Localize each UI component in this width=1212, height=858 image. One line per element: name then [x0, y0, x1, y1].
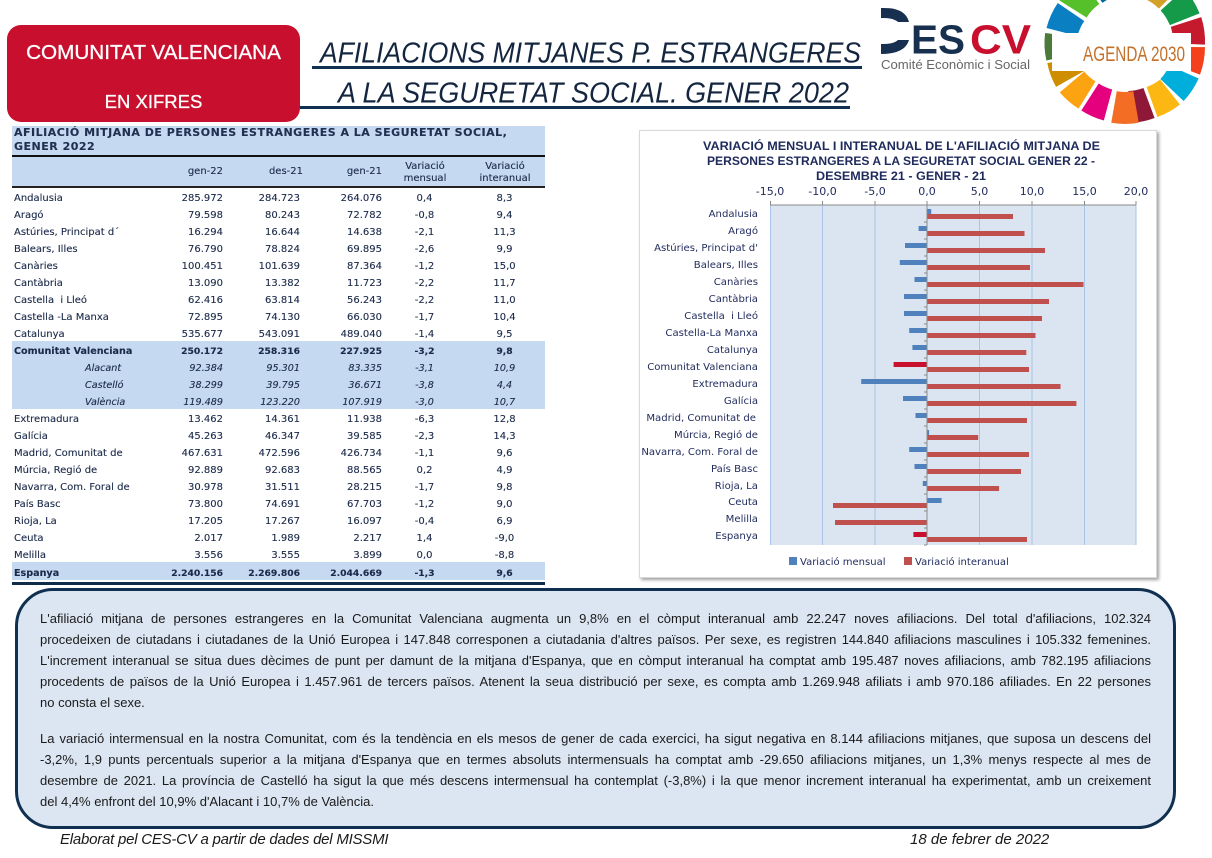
category labels: Astúries, Principat d': [654, 242, 758, 254]
badge: Comunitat Valenciana en xifres: [7, 25, 300, 122]
table rows: -3,8: [415, 380, 434, 391]
table rows: 9,9: [497, 244, 512, 255]
table rows: 0,2: [417, 465, 432, 476]
table rows: 46.347: [265, 431, 300, 442]
table rows: 6,9: [497, 516, 512, 527]
table rows: Melilla: [14, 550, 46, 561]
table rows: -1,2: [415, 499, 434, 510]
table rows: Andalusia: [14, 193, 63, 204]
category labels: Galícia: [724, 395, 758, 407]
table rows: Ceuta: [14, 533, 44, 544]
table column headers: des-21: [269, 166, 303, 177]
table column headers: gen-22: [188, 166, 223, 177]
table rows: 39.585: [347, 431, 382, 442]
table rows: -2,6: [415, 244, 434, 255]
logo: CES CV: Comité Econòmic i Social: [881, 58, 1030, 72]
table rows: 10,9: [494, 363, 515, 374]
table rows: 1,4: [417, 533, 432, 544]
table rows: 2.217: [353, 533, 382, 544]
table rows: 80.243: [265, 210, 300, 221]
table rows: -1,7: [415, 482, 434, 493]
table rows: 63.814: [265, 295, 300, 306]
table rows: Rioja, La: [14, 516, 57, 527]
table rows: 31.511: [265, 482, 300, 493]
chart title: [703, 140, 1100, 183]
table rows: 72.895: [188, 312, 223, 323]
title: A LA SEGURETAT SOCIAL. GENER 2022: [336, 78, 849, 110]
table rows: 11,3: [493, 227, 516, 238]
paragraph 2: del 4,4% enfront del 10,9% d'Alacant i 10,7% de València.: [40, 794, 374, 809]
table rows: 227.925: [340, 346, 382, 357]
table rows: Cantàbria: [14, 278, 63, 289]
category labels: Comunitat Valenciana: [647, 362, 758, 373]
category labels: Múrcia, Regió de: [674, 429, 758, 441]
x axis labels: 15,0: [1072, 185, 1097, 198]
table rows: 9,4: [497, 210, 512, 221]
table rows: -0,4: [415, 516, 434, 527]
table rows: 16.644: [265, 227, 300, 238]
table rows: 9,6: [496, 568, 513, 578]
table rows: 250.172: [181, 346, 223, 357]
table rows: 2.240.156: [171, 568, 223, 578]
table rows: Comunitat Valenciana: [14, 346, 132, 357]
table rows: Madrid, Comunitat de: [14, 448, 123, 459]
table rows: -8,8: [495, 550, 514, 561]
chart title: PERSONES ESTRANGERES A LA SEGURETAT SOCIAL GENER 22 -: [707, 156, 1095, 168]
paragraph 1: no consta el sexe.: [40, 695, 145, 710]
table rows: 123.220: [260, 397, 300, 408]
table rows: 1.989: [271, 533, 300, 544]
table rows: 74.691: [265, 499, 300, 510]
table rows: 78.824: [265, 244, 300, 255]
table rows: 2.269.806: [248, 568, 300, 578]
table rows: Astúries, Principat d´: [14, 227, 119, 238]
table rows: Castelló: [85, 380, 123, 391]
chart title: VARIACIÓ MENSUAL I INTERANUAL DE L'AFILIACIÓ MITJANA DE: [703, 140, 1100, 153]
category labels: País Basc: [711, 463, 758, 475]
table rows: 76.790: [188, 244, 223, 255]
table rows: 83.335: [348, 363, 382, 374]
category labels: Andalusia: [709, 209, 758, 220]
category labels: Madrid, Comunitat de: [646, 413, 756, 424]
table rows: 30.978: [188, 482, 223, 493]
category labels: Extremadura: [692, 379, 758, 390]
paragraph 1: procedents de països de la Unió Europea i 1.457.961 de tercers països. Atenent la seua distribució per sexe, es compta amb 1.269.948 afiliats i amb 970.186 afiliades. En 22 persones: [40, 674, 1151, 689]
table column headers: interanual: [479, 172, 530, 184]
table rows: 45.263: [188, 431, 223, 442]
table rows: -9,0: [495, 533, 514, 544]
table rows: -2,3: [415, 431, 434, 442]
table rows: -3,1: [415, 363, 434, 374]
table rows: 15,0: [493, 261, 516, 272]
table rows: 11.938: [347, 414, 382, 425]
table column headers: gen-21: [347, 166, 382, 177]
table rows: Extremadura: [14, 414, 79, 425]
table rows: 3.556: [194, 550, 223, 561]
table rows: 258.316: [258, 346, 300, 357]
table rows: -2,1: [415, 227, 434, 238]
table rows: 285.972: [182, 193, 223, 204]
table rows: 87.364: [347, 261, 382, 272]
paragraph 2: desembre de 2021. La província de Castelló ha sigut la que més descens intermensual ha contemplat (-3,8%) i la que menor increment interanual ha experimentat, amb un creixement: [40, 773, 1151, 788]
table rows: 9,0: [497, 499, 512, 510]
chart title: DESEMBRE 21 - GENER - 21: [816, 171, 987, 183]
table rows: 284.723: [259, 193, 300, 204]
table rows: 543.091: [259, 329, 300, 340]
table rows: -1,4: [415, 329, 434, 340]
category labels: Rioja, La: [715, 481, 758, 492]
table heading: GENER 2022: [14, 140, 95, 153]
table rows: Navarra, Com. Foral de: [14, 482, 130, 493]
table rows: 9,8: [496, 346, 513, 357]
x axis labels: 5,0: [971, 185, 988, 198]
table rows: 3.899: [353, 550, 382, 561]
table rows: [12, 193, 545, 580]
table heading: [12, 126, 545, 155]
paragraph 2: -3,2%, 1,9 punts percentuals superior a la mitjana d'Espanya que en termes absoluts intermensuals ha comptat amb -29.650 afiliacions mitjanes, un 1,3% menys respecte al mes de: [40, 752, 1151, 767]
table rows: 13.382: [265, 278, 300, 289]
logo: CES CV: [881, 8, 1032, 72]
category labels: Ceuta: [728, 497, 758, 508]
table rows: 38.299: [189, 380, 223, 391]
bar chart panel: [639, 130, 1161, 582]
table rows: 0,4: [417, 193, 432, 204]
category labels: Aragó: [728, 225, 758, 237]
paragraph 1: L'afiliació mitjana de persones estrangeres en la Comunitat Valenciana augmenta un 9,8% en el còmput interanual amb 22.247 noves afiliacions. Del total d'afiliacions, 102.324: [40, 611, 1151, 626]
table rows: Espanya: [14, 568, 59, 578]
table rows: 28.215: [347, 482, 382, 493]
monthly variation bars: [861, 209, 942, 537]
category labels: Balears, Illes: [694, 260, 758, 271]
logo: CES CV: ES: [911, 16, 965, 62]
table rows: -6,3: [415, 414, 434, 425]
table rows: 9,5: [497, 329, 512, 340]
table rows: 14.361: [265, 414, 300, 425]
table rows: 95.301: [266, 363, 300, 374]
table rows: 66.030: [347, 312, 382, 323]
legend: Variació mensual: [800, 556, 885, 568]
table rows: 62.416: [188, 295, 223, 306]
data table: [12, 126, 545, 585]
table rows: 92.889: [188, 465, 223, 476]
table rows: -1,3: [414, 568, 435, 578]
icon: Agenda 2030 wheel: [1044, 0, 1205, 124]
table rows: 67.703: [347, 499, 382, 510]
footer: source: Elaborat pel CES-CV a partir de dades del MISSMI: [60, 831, 388, 848]
axes: [770, 201, 1136, 545]
table rows: Canàries: [14, 261, 58, 272]
table rows: 3.555: [271, 550, 300, 561]
badge: Comunitat Valenciana en xifres: EN XIFRES: [105, 91, 202, 112]
table rows: -1,7: [415, 312, 434, 323]
text panel: [15, 588, 1176, 829]
table rows: -1,2: [415, 261, 434, 272]
table rows: 100.451: [182, 261, 223, 272]
category labels: Castella i Lleó: [684, 310, 758, 322]
table rows: Castella i Lleó: [14, 295, 87, 306]
table rows: 101.639: [259, 261, 300, 272]
table rows: -3,2: [414, 346, 435, 357]
table rows: 9,6: [497, 448, 512, 459]
table rows: 9,8: [497, 482, 512, 493]
table rows: 2.044.669: [330, 568, 382, 578]
table rows: 69.895: [347, 244, 382, 255]
table rows: 14,3: [493, 431, 516, 442]
table rows: País Basc: [14, 499, 61, 510]
table rows: 472.596: [259, 448, 300, 459]
category labels: Navarra, Com. Foral de: [641, 447, 758, 458]
title: [300, 38, 862, 110]
x axis labels: -10,0: [808, 185, 837, 198]
table rows: Aragó: [14, 210, 44, 221]
table rows: 72.782: [347, 210, 382, 221]
table rows: 13.090: [188, 278, 223, 289]
table rows: 36.671: [348, 380, 382, 391]
table rows: 14.638: [347, 227, 382, 238]
table rows: 107.919: [342, 397, 382, 408]
table rows: 17.205: [188, 516, 223, 527]
table rows: 16.294: [188, 227, 223, 238]
legend: [789, 556, 1009, 568]
table rows: -1,1: [415, 448, 434, 459]
annual variation bars: [833, 214, 1084, 542]
table rows: -3,0: [415, 397, 434, 408]
table rows: 11,7: [493, 278, 516, 289]
table rows: 10,7: [494, 397, 515, 408]
paragraph 2: [40, 731, 1151, 809]
table rows: 92.683: [265, 465, 300, 476]
table column headers: mensual: [404, 172, 446, 184]
x axis labels: 20,0: [1124, 185, 1148, 198]
paragraph 1: [40, 611, 1151, 710]
plot area: [770, 205, 1136, 545]
table rows: Múrcia, Regió de: [14, 465, 97, 476]
category labels: Catalunya: [707, 345, 758, 356]
x axis labels: [756, 185, 1148, 198]
table rows: Castella -La Manxa: [14, 312, 109, 323]
table rows: Balears, Illes: [14, 244, 78, 255]
table rows: 4,9: [497, 465, 512, 476]
table rows: 12,8: [493, 414, 516, 425]
x axis labels: -15,0: [756, 185, 784, 198]
table rows: 11,0: [493, 295, 516, 306]
table rows: 467.631: [182, 448, 223, 459]
table rows: Alacant: [85, 363, 121, 374]
badge: Comunitat Valenciana en xifres: COMUNITAT VALENCIANA: [26, 41, 281, 64]
table heading: AFILIACIÓ MITJANA DE PERSONES ESTRANGERES A LA SEGURETAT SOCIAL,: [14, 126, 507, 139]
category labels: Melilla: [726, 514, 758, 525]
paragraph 1: procedeixen de ciutadans i ciutadanes de la Unió Europea i 147.848 corresponen a ciutadania d'altres països. Per sexe, es registren 144.840 afiliacions masculines i 105.332 femenines.: [40, 632, 1151, 647]
x axis labels: 10,0: [1020, 185, 1044, 198]
paragraph 2: La variació intermensual en la nostra Comunitat, com és la tendència en els mesos de gener de cada exercici, ha sigut negativa en 8.144 afiliacions mitjanes, que suposa un descens del: [40, 731, 1151, 746]
table rows: 0,0: [417, 550, 432, 561]
table rows: 426.734: [341, 448, 382, 459]
table rows: 264.076: [341, 193, 382, 204]
footer: date: 18 de febrer de 2022: [910, 831, 1049, 848]
table column headers: [12, 155, 545, 188]
table rows: València: [85, 397, 125, 408]
table rows: 73.800: [188, 499, 223, 510]
table rows: 535.677: [182, 329, 223, 340]
x axis labels: -5,0: [864, 185, 886, 198]
table rows: 88.565: [347, 465, 382, 476]
table rows: 119.489: [183, 397, 223, 408]
table rows: 2.017: [194, 533, 223, 544]
x axis labels: 0,0: [918, 185, 936, 198]
table rows: Galícia: [14, 431, 48, 442]
table rows: 74.130: [265, 312, 300, 323]
table rows: -2,2: [415, 278, 434, 289]
category labels: Castella-La Manxa: [665, 328, 758, 339]
table rows: 16.097: [347, 516, 382, 527]
category labels: Canàries: [714, 276, 758, 288]
table rows: 11.723: [347, 278, 382, 289]
table rows: 79.598: [188, 210, 223, 221]
table rows: -0,8: [415, 210, 434, 221]
category labels: Espanya: [715, 531, 758, 542]
table rows: 39.795: [266, 380, 300, 391]
table rows: 17.267: [265, 516, 300, 527]
paragraph 1: L'increment interanual se situa dues dècimes de punt per damunt de la mitjana d'Espanya, que en còmput interanual ha comptat amb 195.487 noves afiliacions, amb 782.195 afiliacions: [40, 653, 1151, 668]
table column headers: Variació: [405, 161, 445, 172]
category labels: Cantàbria: [709, 293, 758, 305]
table rows: 8,3: [497, 193, 512, 204]
category labels: [641, 209, 758, 542]
table rows: 56.243: [347, 295, 382, 306]
table column headers: Variació: [485, 161, 525, 172]
table rows: 10,4: [493, 312, 516, 323]
table rows: -2,2: [415, 295, 434, 306]
table rows: 13.462: [188, 414, 223, 425]
table rows: 4,4: [497, 380, 512, 391]
legend: Variació interanual: [915, 556, 1009, 568]
logo: CES CV: CV: [970, 16, 1032, 62]
table rows: Catalunya: [14, 329, 65, 340]
table rows: 489.040: [341, 329, 382, 340]
table rows: 92.384: [189, 363, 223, 374]
